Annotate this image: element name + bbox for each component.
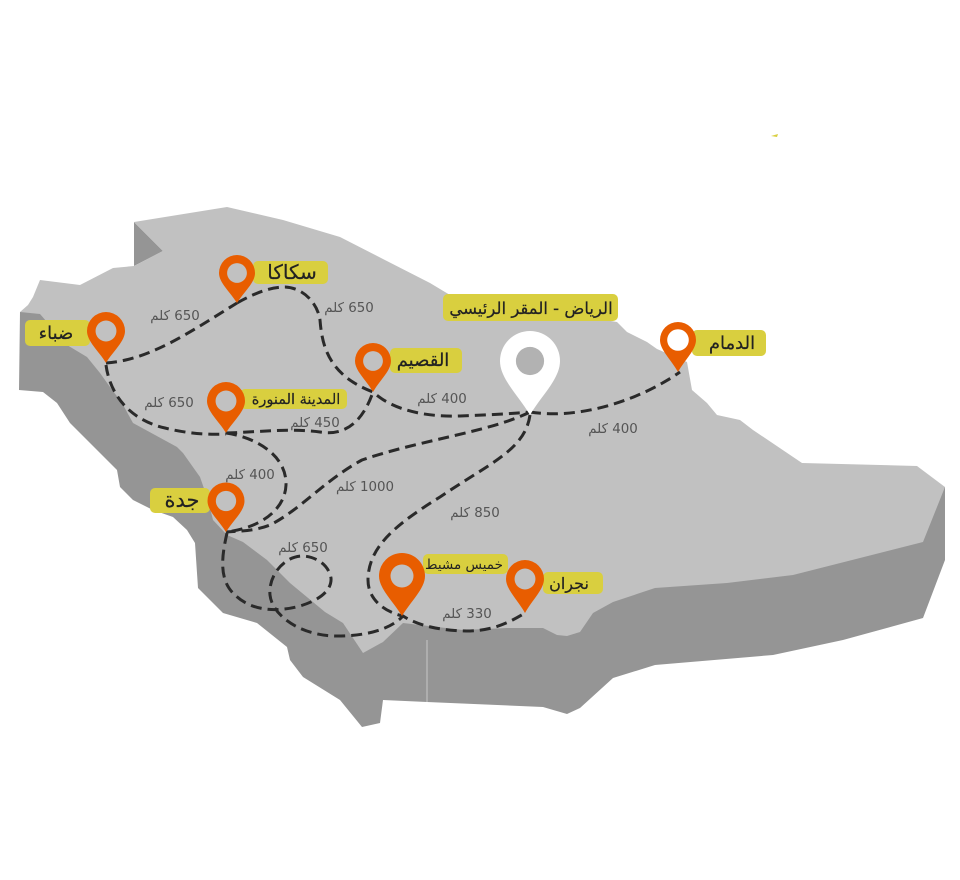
pin: Riyadh — [500, 331, 560, 415]
route: Dhuba to Sakaka — [106, 303, 237, 363]
distance 330 Khamis Najran: 330 كلم — [442, 607, 492, 622]
route lines — [106, 287, 680, 636]
pin: Dammam — [660, 322, 696, 372]
distance 400 Qassim Riyadh: 400 كلم — [417, 392, 467, 407]
label: Medina — [240, 389, 347, 409]
route: Jeddah loop to Khamis Mushait — [223, 533, 403, 636]
distance 650 Dhuba Sakaka: 650 كلم — [150, 309, 200, 324]
label: Jeddah: جدة — [164, 488, 200, 512]
map notch shadow — [134, 222, 163, 266]
label: Medina: المدينة المنورة — [252, 392, 340, 408]
label: Najran — [543, 572, 603, 594]
distance 450 Medina Qassim: 450 كلم — [290, 416, 340, 431]
distance 1000 Riyadh Jeddah: 1000 كلم — [336, 480, 394, 495]
distance 650 Sakaka Qassim: 650 كلم — [324, 301, 374, 316]
route: Sakaka to Qassim to Riyadh — [237, 287, 530, 416]
label: Dhuba — [25, 320, 90, 346]
small yellow mark — [771, 134, 778, 137]
pin: Najran — [506, 560, 544, 613]
route: Dhuba to Medina — [106, 365, 226, 434]
route: Riyadh to Dammam — [530, 372, 680, 414]
distance 400 Medina Jeddah: 400 كلم — [225, 468, 275, 483]
route: Riyadh to Khamis Mushait to Najran — [368, 415, 530, 631]
pin: Khamis Mushait — [379, 553, 425, 616]
label: Dammam — [692, 330, 766, 356]
label: Sakaka: سكاكا — [267, 260, 317, 284]
label: Sakaka — [253, 260, 328, 284]
label: Riyadh headquarters: الرياض - المقر الرئيسي — [449, 299, 613, 319]
pin: Medina — [207, 382, 245, 433]
pin: Sakaka — [219, 255, 255, 303]
label: Riyadh headquarters — [443, 294, 618, 321]
label: Khamis Mushait: خميس مشيط — [425, 557, 503, 573]
route: Riyadh to Jeddah — [226, 412, 530, 532]
map border hairline — [426, 640, 428, 702]
distance 650 Jeddah Khamis: 650 كلم — [278, 541, 328, 556]
label: Dhuba: ضباء — [39, 323, 73, 344]
distance labels — [144, 301, 638, 622]
label: Qassim: القصيم — [397, 350, 449, 371]
route: Medina to Jeddah — [226, 433, 286, 532]
distance 400 Riyadh Dammam: 400 كلم — [588, 422, 638, 437]
pin: Jeddah — [208, 482, 244, 532]
pin: Qassim — [355, 343, 391, 392]
pin: Dhuba — [87, 312, 125, 363]
label: Jeddah — [150, 488, 210, 513]
route: Medina to Qassim — [226, 392, 373, 433]
distance 850 Riyadh Khamis: 850 كلم — [450, 506, 500, 521]
map side face — [19, 310, 945, 727]
distance 650 Dhuba Medina: 650 كلم — [144, 396, 194, 411]
label: Najran: نجران — [549, 574, 589, 594]
map of Saudi Arabia — [19, 207, 945, 727]
map top face — [20, 207, 945, 653]
label: Qassim — [390, 348, 462, 373]
label: Dammam: الدمام — [709, 333, 755, 354]
